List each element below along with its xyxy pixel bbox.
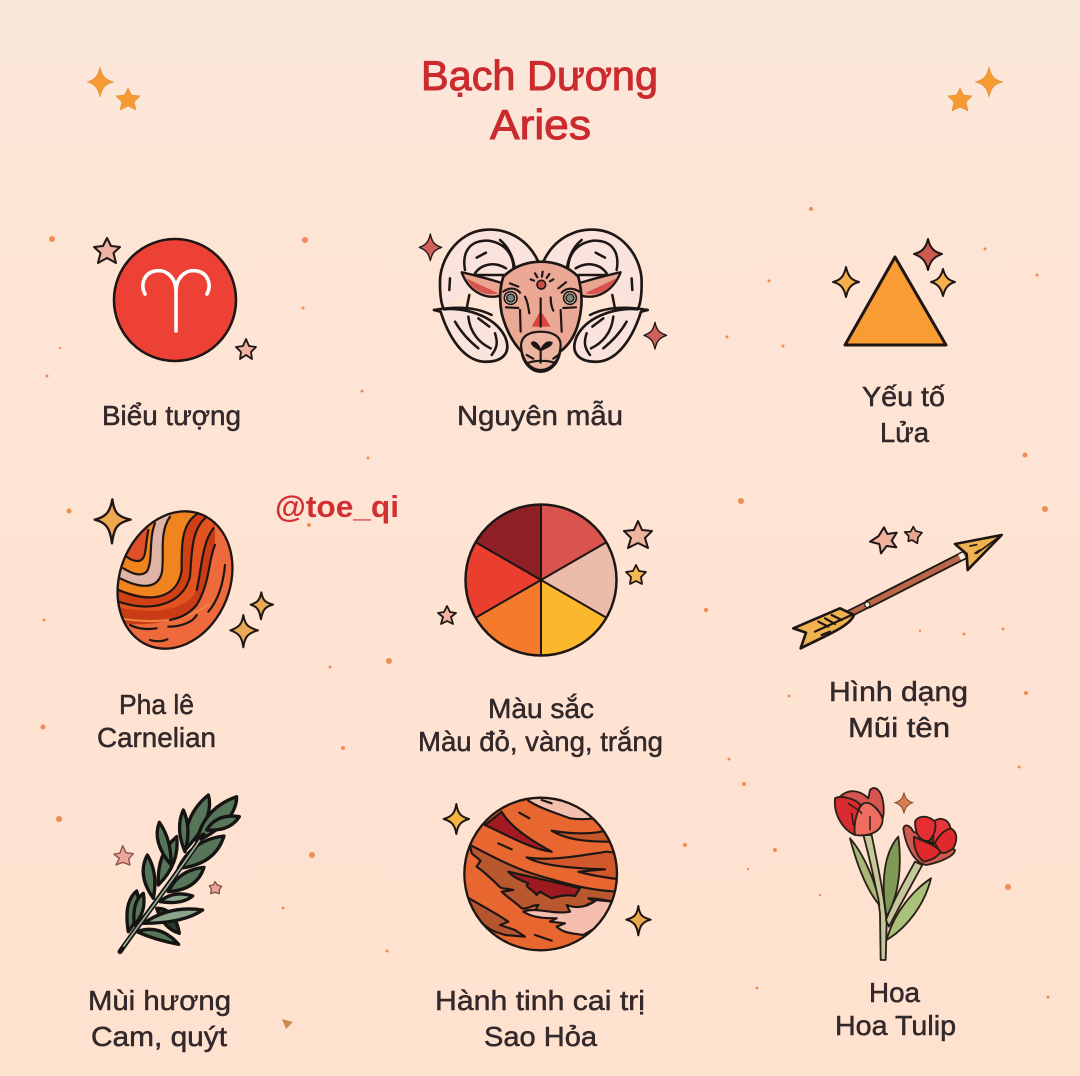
label: ruling planet: Hành tinh cai trị [435, 985, 645, 1016]
pie: colours [438, 504, 652, 656]
label: symbol: Biểu tượng [102, 400, 241, 431]
label: flower: Hoa Tulip [835, 1010, 956, 1041]
label: crystal: Pha lê [119, 689, 194, 720]
label: crystal [97, 689, 216, 753]
label: colours [418, 693, 663, 757]
label: ruling planet [435, 985, 645, 1052]
left horn [434, 230, 538, 362]
right horn [543, 230, 648, 362]
title [421, 52, 658, 148]
label: shape [829, 676, 968, 743]
label: scent: Mùi hương [88, 985, 231, 1016]
icon: planet mars [444, 797, 651, 950]
label: colours: Màu sắc [488, 693, 594, 724]
label: ruling planet: Sao Hỏa [484, 1021, 597, 1052]
ears [462, 272, 503, 297]
label: flower [835, 977, 956, 1041]
label: shape: Mũi tên [848, 712, 950, 743]
label: element [862, 381, 945, 448]
label: element: Lửa [880, 417, 929, 448]
title: Aries [490, 101, 591, 148]
eyes [504, 292, 517, 304]
icon: carnelian crystal [94, 498, 274, 650]
icon: aries symbol [94, 238, 256, 361]
decorative stars top right [948, 67, 1003, 111]
forehead mark and features [537, 280, 546, 289]
label: scent [88, 985, 231, 1052]
scattered dots [40, 207, 1050, 1029]
decorative stars top left [87, 67, 140, 110]
ram sparkles [419, 234, 442, 261]
icon: ram head [419, 230, 667, 372]
label: colours: Màu đỏ, vàng, trắng [418, 726, 663, 757]
face [500, 262, 582, 372]
label: flower: Hoa [869, 977, 920, 1008]
label: element: Yếu tố [862, 381, 945, 412]
watermark: @toe_qi [275, 489, 399, 524]
label: archetype: Nguyên mẫu [457, 400, 623, 431]
label: crystal: Carnelian [97, 722, 216, 753]
icon: tulips [835, 788, 956, 960]
icon: rosemary sprig [114, 795, 239, 952]
label: shape: Hình dạng [829, 676, 968, 707]
icon: fire triangle [833, 239, 955, 345]
label: scent: Cam, quýt [91, 1021, 227, 1052]
title: Bạch Dương [421, 52, 658, 99]
icon: arrow [793, 527, 1002, 648]
